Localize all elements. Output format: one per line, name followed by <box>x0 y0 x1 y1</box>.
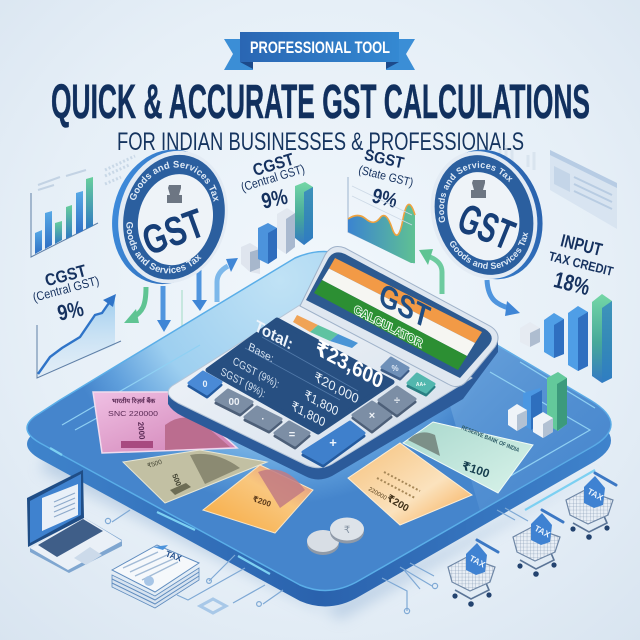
platform bars: right <box>508 372 567 438</box>
ribbon badge <box>224 32 415 70</box>
keypad: AA+ <box>416 382 426 388</box>
keypad: · <box>261 414 265 425</box>
banknote: teal 100 <box>403 422 533 493</box>
emblem <box>471 180 486 198</box>
shopping cart 2 <box>513 510 563 577</box>
platform <box>27 252 611 606</box>
shopping cart 3: TAX <box>586 486 605 503</box>
keypad: 0 <box>202 379 208 389</box>
display: ₹20,000 <box>312 369 361 407</box>
keypad <box>189 358 434 466</box>
label: CGST centre <box>239 149 306 214</box>
display: CGST (9%): <box>231 355 281 391</box>
coins: ₹ <box>344 525 350 536</box>
screen flag: GST <box>376 276 433 335</box>
label: CGST centre: (Central GST) <box>239 162 306 195</box>
banknote: teal 100: RESERVE BANK OF INDIA <box>460 425 520 454</box>
calculator <box>168 247 498 480</box>
coins <box>307 518 364 555</box>
display: Base: <box>247 341 275 365</box>
keypad: = <box>289 429 295 441</box>
document stack: TAX: TAX <box>164 548 183 564</box>
label: SGST <box>357 147 415 213</box>
area chart: SGST <box>348 177 415 263</box>
seal ring text: Goods and Services Tax <box>126 222 202 274</box>
banknote: orange right 200: 220000 <box>367 487 388 502</box>
display <box>208 318 392 432</box>
label: SGST: 9% <box>370 185 400 213</box>
platform shadow <box>40 430 600 620</box>
label: CGST left: 9% <box>55 296 86 326</box>
line chart: lower left <box>37 294 121 378</box>
keypad: × <box>369 410 375 422</box>
display: ₹1,800 <box>289 399 327 430</box>
banknote: orange right 200 <box>348 443 472 525</box>
banknote: pink 2000: 2000 <box>136 421 147 440</box>
banknote: olive 500: 500 <box>170 472 183 487</box>
arrow: SGST green <box>419 249 442 294</box>
label: CGST centre: CGST <box>251 149 297 180</box>
seal ring text: Goods and Services Tax <box>438 161 513 222</box>
seal ring text: Goods and Services Tax <box>450 232 528 269</box>
banknote: pink 2000: भारतीय रिज़र्व बैंक <box>112 397 156 405</box>
emblem <box>167 185 182 203</box>
banknote: olive 500: ₹500 <box>147 459 163 470</box>
seal ring text <box>126 160 218 274</box>
seal: left GST <box>112 150 228 284</box>
arrow: right seal to bars <box>487 280 520 316</box>
document stack: TAX <box>112 545 199 608</box>
display: SGST (9%): <box>219 366 267 401</box>
label: input tax credit <box>547 230 615 300</box>
circuit lines <box>105 508 528 614</box>
calculator side <box>168 338 498 480</box>
screen housing <box>300 247 498 387</box>
arrows from left seal <box>124 258 238 332</box>
seal: left GST: GST <box>136 200 210 264</box>
display: ₹23,600 <box>312 336 386 394</box>
calculator body <box>168 290 472 468</box>
keypad: % <box>391 364 399 373</box>
ribbon badge: PROFESSIONAL TOOL <box>250 38 390 57</box>
bar chart: upper left <box>31 156 135 257</box>
faded web window <box>500 145 617 229</box>
bar chart: 3D centre <box>241 182 313 274</box>
banknote: pink 2000: SNC 220000 <box>108 411 158 418</box>
banknote: olive 500 <box>123 450 267 503</box>
label: CGST left <box>31 261 101 326</box>
keypad: 00 <box>228 397 240 408</box>
screen flag: CALCULATOR <box>352 304 424 351</box>
seal: right GST <box>431 150 543 280</box>
label: SGST: (State GST) <box>357 163 415 190</box>
keypad: + <box>329 435 337 450</box>
banknote: orange left: ₹200 <box>251 494 273 509</box>
seal ring text: Goods and Services Tax <box>130 160 218 202</box>
display: Total: <box>252 318 295 354</box>
seal: right GST: GST <box>452 194 521 259</box>
label: CGST left: CGST <box>43 261 89 290</box>
screen flag <box>314 258 482 370</box>
display: ₹1,800 <box>302 388 340 419</box>
label: input tax credit: 18% <box>551 266 593 300</box>
shopping cart 3 <box>566 473 616 540</box>
bar chart: right 3D <box>520 294 612 383</box>
label: input tax credit: INPUT <box>559 230 604 260</box>
banknote: orange left <box>203 465 313 533</box>
banknote: pink 2000 <box>93 392 237 453</box>
label: CGST left: (Central GST) <box>31 274 101 305</box>
label: SGST: SGST <box>363 147 406 172</box>
banknote: teal 100: ₹100 <box>460 459 492 481</box>
seal ring text <box>438 161 528 269</box>
label: CGST centre: 9% <box>259 184 290 214</box>
shopping cart 2: TAX <box>533 523 552 540</box>
colour strip <box>293 315 358 348</box>
keypad: ÷ <box>394 395 400 407</box>
shopping cart 1 <box>448 540 498 607</box>
label: input tax credit: TAX CREDIT <box>547 248 615 279</box>
banknote: orange right 200: ₹200 <box>384 493 411 515</box>
shopping cart 1: TAX <box>468 553 487 570</box>
laptop <box>27 470 122 573</box>
